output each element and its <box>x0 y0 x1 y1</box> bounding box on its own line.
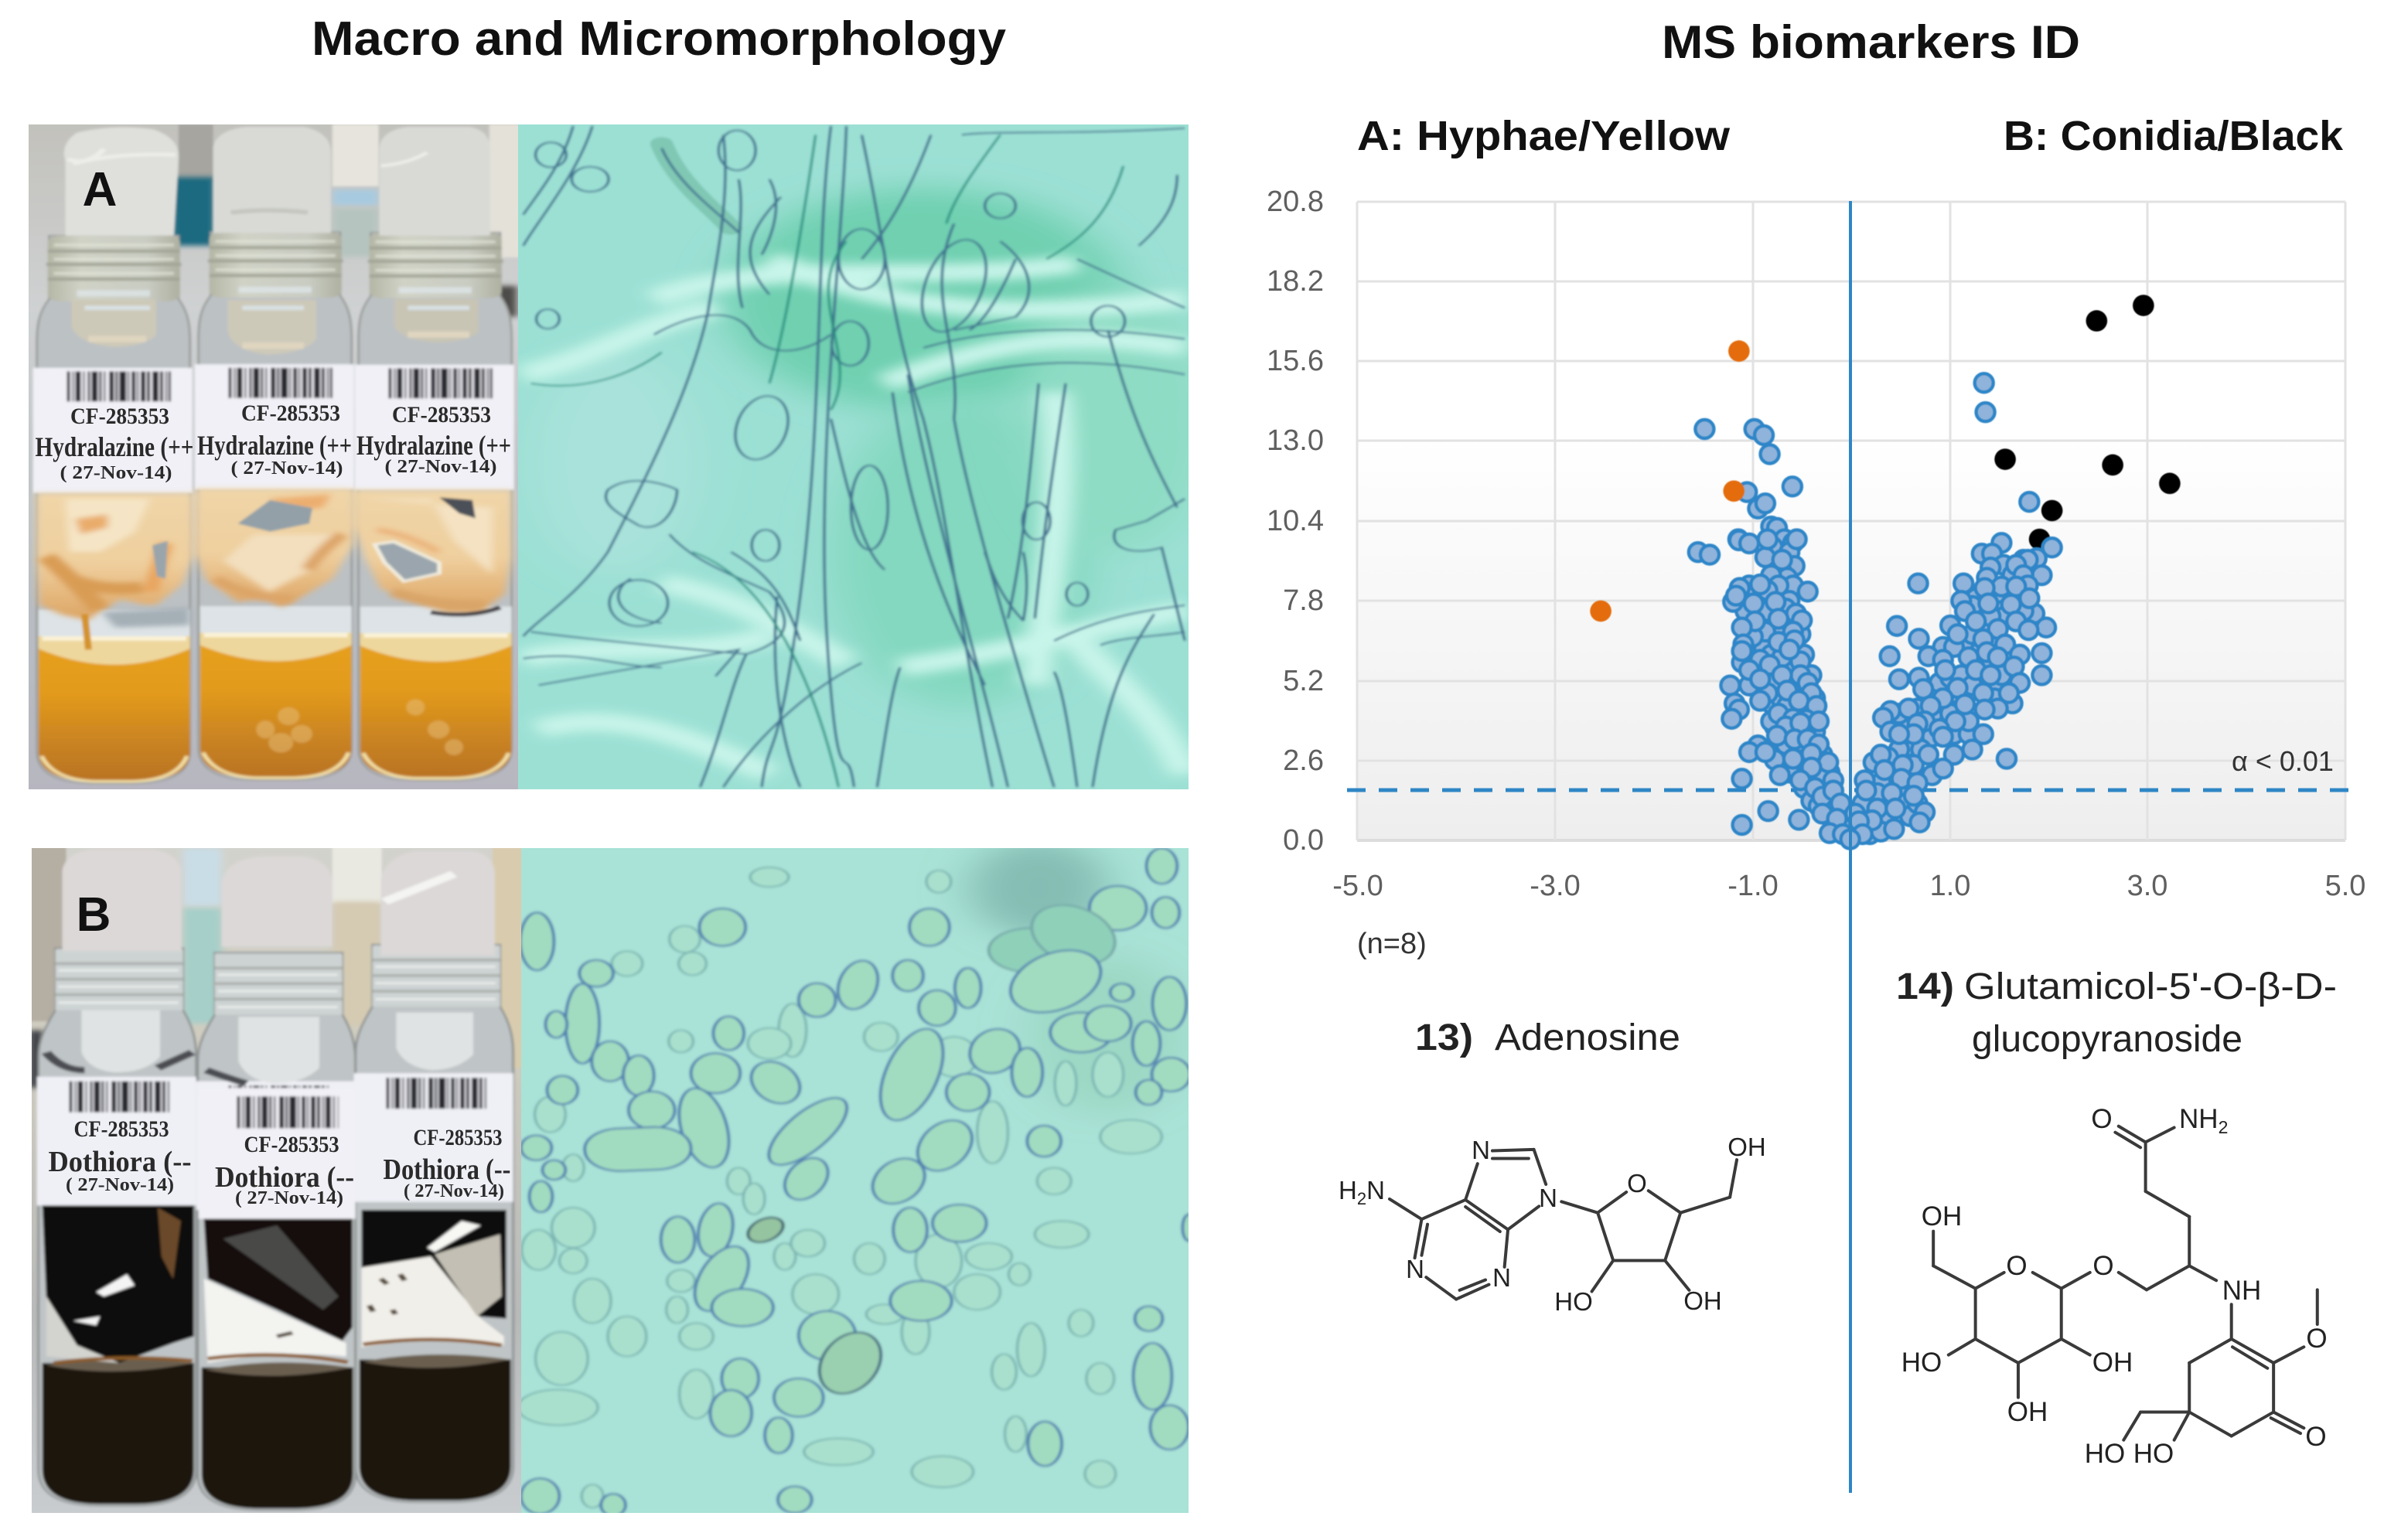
structure: glutamicol glucopyranoside: O <box>2091 1104 2113 1134</box>
micrograph A: hyphae <box>516 121 1208 792</box>
structure: glutamicol glucopyranoside: OH <box>1922 1201 1962 1232</box>
x axis labels: 1.0 <box>1930 870 1970 902</box>
vial labels B: Dothiora (-- <box>384 1153 510 1186</box>
x axis labels: -3.0 <box>1530 870 1581 902</box>
y axis labels: 2.6 <box>1283 744 1324 777</box>
structure: adenosine: O <box>1627 1169 1647 1198</box>
compound 14 name <box>1896 966 2337 1060</box>
structure: glutamicol glucopyranoside: HO <box>2085 1439 2125 1469</box>
y axis labels: 0.0 <box>1283 824 1324 857</box>
y axis labels: 15.6 <box>1267 345 1324 377</box>
structure: adenosine: H <box>1339 1176 1357 1204</box>
vial labels A: ( 27-Nov-14) <box>230 458 343 479</box>
vial labels A: Hydralazine (++ <box>197 430 352 461</box>
y axis labels: 5.2 <box>1283 665 1324 697</box>
cotton plugs <box>63 849 495 956</box>
threshold label: α < 0.01 <box>2232 745 2334 777</box>
plug ends inside vials <box>72 299 479 355</box>
vial labels A: CF-285353 <box>392 402 491 428</box>
compound 14 name: Glutamicol-5'-O-β-D- <box>1964 966 2337 1007</box>
structure: glutamicol glucopyranoside: 2 <box>2219 1117 2228 1137</box>
vial labels A: CF-285353 <box>241 400 340 426</box>
structure: adenosine: 2 <box>1357 1189 1366 1208</box>
vial labels A: Hydralazine (++ <box>356 430 511 461</box>
gridlines <box>1357 202 2345 840</box>
compound 13 name: 13) <box>1415 1017 1473 1058</box>
structure: adenosine: N <box>1492 1263 1511 1292</box>
blue points right branch <box>1841 373 2062 849</box>
structure: glutamicol glucopyranoside: O <box>2006 1251 2028 1281</box>
sample size note: (n=8) <box>1357 928 1427 960</box>
vial labels B: CF-285353 <box>74 1116 169 1142</box>
data points <box>1590 295 2181 849</box>
y axis labels: 20.8 <box>1267 186 1324 218</box>
compound 13 name: Adenosine <box>1495 1017 1680 1058</box>
structure: glutamicol glucopyranoside: O <box>2305 1422 2327 1452</box>
vial labels B: CF-285353 <box>413 1125 503 1150</box>
significance threshold dashed line <box>1347 789 2355 792</box>
vial labels B <box>48 1116 510 1208</box>
vial labels A: CF-285353 <box>70 404 169 429</box>
structure: adenosine: N <box>1539 1184 1557 1212</box>
letter B: B <box>77 888 111 942</box>
y axis labels: 10.4 <box>1267 505 1324 537</box>
vial labels B: ( 27-Nov-14) <box>235 1188 343 1208</box>
structure: glutamicol glucopyranoside: NH <box>2179 1104 2219 1134</box>
micrograph B: conidia <box>516 840 1195 1518</box>
vial labels A: Hydralazine (++ <box>36 431 193 462</box>
structure: glutamicol glucopyranoside: O <box>2306 1324 2328 1354</box>
y axis labels <box>1267 186 1324 857</box>
structure: glutamicol glucopyranoside: NH <box>2222 1276 2261 1306</box>
volcano plot <box>1267 186 2365 1493</box>
x axis labels: 3.0 <box>2127 870 2167 902</box>
structure: adenosine: HO <box>1554 1287 1593 1316</box>
blue points left branch <box>1689 420 1860 843</box>
black biomarkers <box>1994 295 2181 550</box>
heading: A Hyphae/Yellow: A: Hyphae/Yellow <box>1357 113 1731 159</box>
structure: adenosine: OH <box>1683 1286 1722 1315</box>
y axis labels: 7.8 <box>1283 584 1324 617</box>
cotton plugs <box>64 127 490 236</box>
compound 14 name: glucopyranoside <box>1972 1019 2242 1060</box>
x axis labels: 5.0 <box>2325 870 2365 902</box>
plot background <box>1357 202 2345 840</box>
letter A: A <box>83 163 117 216</box>
heading: B Conidia/Black: B: Conidia/Black <box>2004 113 2344 159</box>
panel A: vials with yellow culture <box>23 121 524 792</box>
structure: adenosine: N <box>1472 1136 1490 1164</box>
centre zero line <box>1849 201 1852 1493</box>
structure: adenosine: N <box>1406 1255 1424 1283</box>
panel B: vials with black culture <box>23 843 531 1518</box>
structure: glutamicol glucopyranoside: HO <box>2133 1439 2174 1469</box>
vial labels A <box>36 400 511 483</box>
x axis labels: -1.0 <box>1727 870 1779 902</box>
structure: glutamicol glucopyranoside <box>1901 1104 2328 1469</box>
structure: adenosine <box>1339 1133 1766 1316</box>
x axis labels <box>1332 870 2365 902</box>
x axis labels: -5.0 <box>1332 870 1383 902</box>
structure: adenosine: N <box>1366 1176 1385 1204</box>
structure: glutamicol glucopyranoside: HO <box>1901 1348 1942 1378</box>
vial labels A: ( 27-Nov-14) <box>60 463 172 483</box>
vial labels B: ( 27-Nov-14) <box>66 1175 174 1195</box>
compound 13 name <box>1415 1017 1680 1058</box>
vial labels B: Dothiora (-- <box>48 1146 192 1178</box>
structure: adenosine: OH <box>1727 1133 1766 1161</box>
vial labels B: Dothiora (-- <box>215 1161 354 1194</box>
structure: glutamicol glucopyranoside: O <box>2092 1251 2114 1281</box>
mycelium <box>36 489 512 620</box>
title: MS biomarkers ID: MS biomarkers ID <box>1662 16 2080 68</box>
y axis labels: 18.2 <box>1267 265 1324 298</box>
compound 14 name: 14) <box>1896 966 1954 1007</box>
title: Macro and Micromorphology: Macro and Micromorphology <box>312 12 1007 66</box>
structure: glutamicol glucopyranoside: OH <box>2092 1348 2133 1378</box>
vial labels B: CF-285353 <box>244 1132 339 1157</box>
structure: glutamicol glucopyranoside: OH <box>2007 1397 2048 1427</box>
plug ends inside vials <box>81 1010 473 1083</box>
vial labels A: ( 27-Nov-14) <box>385 457 496 477</box>
y axis labels: 13.0 <box>1267 424 1324 457</box>
orange biomarkers <box>1590 340 1750 622</box>
vial labels B: ( 27-Nov-14) <box>404 1181 504 1201</box>
